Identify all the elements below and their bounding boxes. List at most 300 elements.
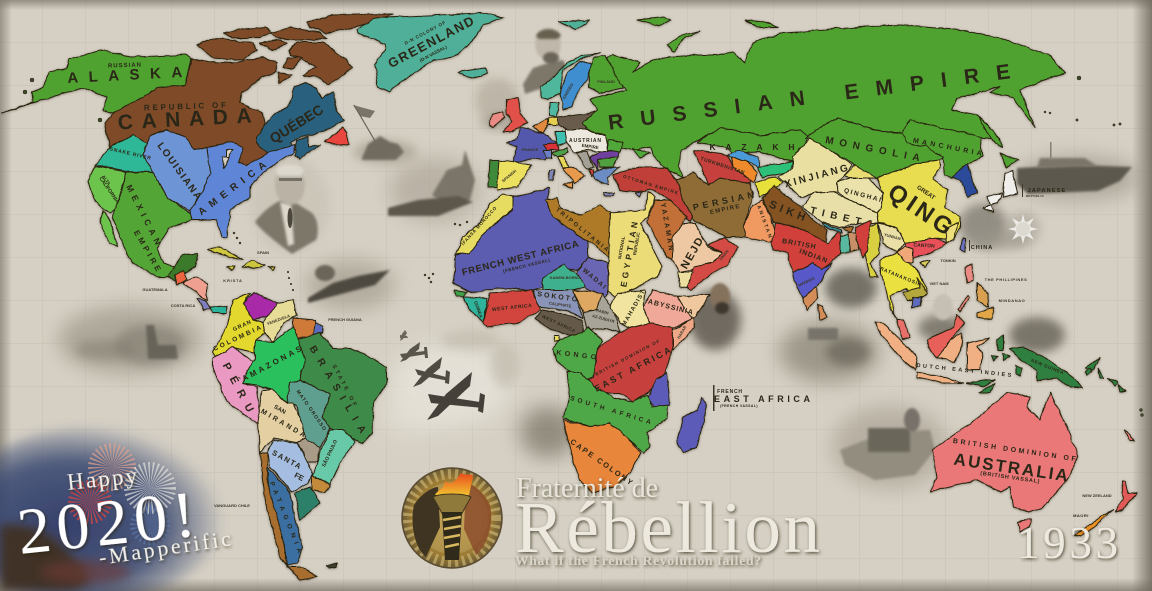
label: Wadai: WADAI (581, 267, 607, 291)
label: Harar: HARAR (676, 325, 688, 340)
label: British Dominion of Australia: (BRITISH VASSAL) (980, 471, 1040, 485)
territory: French West Africa (453, 188, 588, 293)
territory: Somalia (677, 295, 710, 320)
sepia photo: Chinese leader with smoke (959, 203, 1028, 250)
label: Austrian Empire: EMPIRE (581, 143, 599, 150)
label: Ottoman Empire: OTTOMAN EMPIRE (622, 174, 678, 195)
label: Kazakh: KAZAKH (710, 142, 794, 152)
label: French East Africa: (FRENCH VASSAL) (720, 404, 758, 408)
territory: Sakhalin (977, 115, 1002, 148)
title: Fraternité de: Fraternité de (516, 473, 658, 504)
territory: Annam (903, 277, 927, 300)
territory: Alaska (2, 50, 191, 113)
label: Santa Fe: SANTA (271, 448, 304, 471)
territory: Republic of Canada (105, 57, 277, 165)
territory: São Paulo (313, 430, 355, 485)
territory: Bengal (840, 235, 850, 253)
territory: Persian Empire (677, 173, 753, 237)
territory: Canadian Arctic islands (197, 14, 393, 85)
territory: Palawan (958, 295, 970, 312)
territory: Harar (673, 318, 695, 350)
territory: Brasilia (298, 333, 387, 443)
territory: Xinjiang (778, 138, 852, 198)
territory: Turkmenistan (693, 150, 753, 185)
label: British Indian: INDIAN (798, 248, 829, 265)
territory: Belgium (532, 118, 548, 133)
territory: Nepal (822, 223, 842, 233)
territory: San Miranda (258, 390, 305, 453)
territory: Gansu (845, 165, 880, 178)
territory: Panama (210, 306, 227, 313)
sepia photo: Tsar Nicholas portrait (523, 28, 567, 94)
territory: Serbia (577, 152, 593, 170)
label: Rabih az-Zubayr (592, 307, 615, 324)
label: Sikh Empire: SIKH (767, 199, 807, 224)
sepia photo: Roosevelt portrait (253, 161, 326, 256)
label: British Dominion of Australia: AUSTRALIA (953, 450, 1069, 485)
territory: Venetia (552, 147, 568, 157)
territory: Sumatra (875, 322, 917, 370)
territory: Java (917, 372, 963, 383)
label: Brasilia: BRASILIA (307, 344, 368, 435)
region: Americas south (213, 293, 387, 580)
territory: Canton (905, 238, 947, 258)
territory: Guiana (293, 318, 315, 338)
label: Tibet: TIBET (809, 205, 862, 228)
label: French East Africa: EAST AFRICA (714, 394, 810, 404)
label: National Egyptian Republic: NATIONAL (617, 236, 626, 259)
territory: German West Africa (535, 310, 583, 338)
territory: Ratanakosin (880, 252, 927, 322)
territory: Assam (848, 233, 858, 252)
label: Russian Alaska: ALASKA (67, 64, 183, 87)
territory: Visayas (977, 283, 988, 307)
territory: Cape Colony (563, 420, 640, 493)
icon: torch handle (442, 512, 462, 560)
territory: Yunnan (878, 223, 905, 252)
label: Austrian Empire (569, 138, 601, 150)
label: San Miranda: MIRANDA (259, 408, 306, 439)
territory: Guinea (463, 297, 487, 322)
territory: Portugal (488, 160, 499, 187)
label: Alta California: CALIFORNIA (98, 176, 120, 205)
icon: laurel left (412, 487, 440, 557)
label: Manchuria: MANCHURIA (912, 137, 982, 158)
region: Middle East and Central Asia (613, 128, 808, 290)
sepia photo: Iwo Jima statue (353, 105, 417, 164)
region: Americas north (2, 13, 503, 313)
label: Xinjiang: XINJIANG (784, 163, 849, 190)
territory: Melanesia (1085, 357, 1125, 392)
icon: Republic of China white sun (1006, 212, 1040, 246)
region: South and East Asia (763, 118, 1018, 340)
label: Morocco: IFANSA MOROCCO (460, 205, 498, 246)
label: Santa Fe: FE (293, 471, 306, 483)
territory: Kanem Bornu (543, 265, 585, 292)
label: Philippines: THE PHILLIPINES (985, 277, 1027, 282)
label: Louisiana: LOUISIANA (155, 141, 203, 202)
territory: New Guinea (1010, 348, 1083, 388)
territory: Gran Colombia (213, 293, 265, 358)
icon: torch bowl (433, 494, 471, 515)
territory: Malaya (897, 320, 910, 340)
territory: National Egyptian Republic (608, 192, 662, 298)
label: Finland: FINLAND (597, 79, 615, 84)
label: Republic of Canada: REPUBLIC OF (144, 101, 226, 112)
label: Turkmenistan: TURKMENISTAN (700, 156, 745, 176)
territory: Ottoman Empire (613, 167, 693, 222)
territory: Paraguay (297, 438, 320, 462)
label: Hejaz: YAZAMAN (659, 202, 674, 251)
label: Japanese Republic (1022, 184, 1066, 198)
territory: Amazonas (242, 323, 305, 403)
territory: Central Italy (557, 157, 570, 170)
territory: British East Africa (585, 323, 673, 402)
label: Patagonia: PATAGONIA (268, 481, 303, 554)
territory: Great Qing (877, 160, 960, 243)
region: Africa (453, 188, 710, 493)
label: British Dominion of Australia: BRITISH DOMINION OF (952, 438, 1077, 463)
label: Gran Colombia: GRAN (232, 319, 253, 333)
territory: New Zealand north (1115, 482, 1137, 512)
territory: Dutch Borneo (937, 333, 963, 362)
territory: Sokoto (533, 290, 583, 318)
territory: Greece (592, 167, 620, 185)
territory: Korea (953, 163, 978, 198)
territory: Denmark (550, 103, 558, 117)
territory: Great Lakes (222, 150, 233, 168)
territory: Portuguese South Africa (563, 372, 668, 453)
territory: Kano (573, 290, 603, 312)
territory: Peru (213, 347, 260, 423)
icon: far bomber (400, 330, 408, 341)
sepia photo: ship at sea (305, 260, 395, 310)
territory: Vanguard Chile (260, 453, 317, 580)
label: French East Africa (713, 385, 810, 411)
label: State of: STATE OF (330, 364, 358, 408)
territory: Sicily (563, 182, 573, 188)
new year greeting: 2020! (14, 478, 199, 569)
territory: Germany (558, 112, 595, 132)
territory: Oman (687, 237, 738, 290)
label: French West Africa: (FRENCH VASSAL) (503, 257, 551, 274)
icon: laurel right (464, 483, 491, 555)
territory: Crimea (633, 148, 650, 157)
territory: Caribbean islands (207, 247, 275, 270)
territory: Maori south island (1075, 510, 1113, 537)
territory: Abyssinia (643, 290, 693, 328)
label: Guatemala: GUATEMALA (142, 287, 168, 292)
label: France: FRANCE (522, 147, 539, 152)
label: German West Africa: WEST AFRICA (541, 314, 577, 334)
label: Tonkin: TONKIN (940, 258, 956, 263)
label: Greenland: (D-N VASSAL) (419, 44, 448, 63)
territory: Spain (497, 160, 532, 190)
territory: Mato Grosso (287, 380, 330, 448)
subtitle: What if the French Revolution failed? (515, 553, 761, 568)
territory: Patagonia (267, 467, 303, 565)
label: Russian Empire: RUSSIAN EMPIRE (607, 60, 1011, 135)
territory: Naples (563, 167, 585, 183)
territory: Louisiana (143, 130, 210, 213)
label: Dutch East Indies: DUTCH EAST INDIES (916, 363, 1014, 379)
territory: Hejaz (647, 200, 687, 260)
label: Austrian Empire: AUSTRIAN (569, 138, 601, 144)
sepia photo: Pacific smoke (1009, 317, 1065, 353)
territory: Albania (588, 170, 593, 177)
territory: France (507, 128, 557, 163)
label: Snake River: SNAKE RIVER (109, 146, 152, 162)
new year fireworks corner (0, 427, 225, 591)
territory: Tibet (802, 192, 878, 227)
label: San Miranda: SAN (273, 404, 286, 416)
territory: Tripolitania (545, 198, 612, 260)
territory: Ukraine (608, 140, 623, 152)
territory: Philippines Luzon (965, 265, 973, 283)
label: Mexican Empire: EMPIRE (132, 229, 163, 273)
label: Mexican Empire (124, 183, 163, 273)
territory: Timor and Moluccas (966, 335, 1022, 392)
sepia photo: Burma jungle scene (825, 268, 877, 308)
territory: Québec (257, 82, 345, 153)
territory: Krista (183, 277, 207, 300)
territory: West Africa (483, 290, 540, 327)
label: Great Qing: GREAT (915, 185, 936, 202)
label: New Guinea: NEW GUINEA (1030, 358, 1065, 376)
territory: Taiwan (960, 238, 965, 252)
sepia photo: Haile Selassie portrait (689, 283, 741, 350)
territory: Qinghai (837, 178, 883, 213)
small islands (23, 76, 1144, 416)
territory: Austrian Empire (565, 130, 608, 153)
year 1933: 1933 (1017, 518, 1118, 568)
territory: Venezuela (263, 300, 297, 342)
territory: Britain (503, 97, 528, 132)
territory: Greenland (357, 13, 503, 92)
label: Mahadist: MAHADIST (622, 289, 647, 327)
label: Alta California: ALTA (101, 174, 112, 187)
label: Peru: PÉRU (220, 360, 257, 414)
territory: Québec maritime (295, 137, 320, 159)
label: China: CHINA (971, 245, 993, 251)
territory: Mindanao (977, 307, 993, 320)
territory: Fujian (945, 222, 958, 243)
territory: Hokkaido (1000, 153, 1018, 167)
label: Greenland: GREENLAND (385, 13, 476, 71)
territory: Sweden (560, 62, 593, 110)
territory: Russian Empire (583, 25, 1065, 178)
label: Madras: MADRAS (797, 276, 816, 288)
territory: Kokand (758, 162, 793, 177)
territory: Newfoundland (325, 128, 348, 145)
label: Qinghai: QINGHAI (843, 187, 882, 204)
label: Oman: OMAN (718, 249, 730, 261)
territory: Svalbard (558, 20, 590, 30)
territory: Mongolia (805, 118, 945, 178)
label: Persian Empire: EMPIRE (709, 204, 740, 216)
label: National Egyptian Republic: EGYPTIAN (618, 221, 640, 288)
clouds and Lancaster bombers (382, 330, 519, 435)
label: Amazonas: AMAZONAS (241, 344, 304, 383)
sepia photo: battleship and aircraft (388, 150, 481, 222)
territory: Yemen (678, 272, 693, 288)
territory: Bhutan (843, 227, 853, 233)
territory: Japanese Republic south (983, 193, 1002, 213)
label: Gran Colombia: COLOMBIA (212, 324, 263, 353)
label: British Indian (781, 238, 829, 265)
label: Spain: SPANISH (501, 168, 517, 183)
territory: Franz Josef Land (637, 17, 670, 26)
territory: Baja California (100, 210, 117, 247)
territory: Severnaya Zemlya (745, 20, 778, 27)
label: Nejd: NEJD (679, 236, 706, 271)
label: Mongolia: MONGOLIA (824, 135, 921, 164)
territory: Morocco (456, 195, 515, 254)
sepia photo: Indian palace crowd (779, 322, 879, 382)
territory: French Nyasaland (647, 373, 670, 410)
territory: Alta California (88, 166, 127, 213)
territory: Switzerland (555, 132, 567, 145)
territory: Mahadist State (610, 290, 650, 328)
territory: Small Gulf of Guinea (554, 336, 559, 341)
territory: Cambodia (912, 297, 922, 308)
territory: Khiva (728, 150, 760, 168)
label: Viet Nam: VIET NAM (929, 281, 949, 286)
label: National Egyptian Republic: REPUBLIC (632, 231, 641, 256)
territory: Snake River (95, 135, 152, 172)
label: South Africa: SOUTH AFRICA (569, 395, 652, 426)
label: British Indian: BRITISH (781, 238, 817, 251)
label: Spain Caribbean: SPAIN (257, 250, 269, 255)
label: Empire of Kongo: KONGO (556, 350, 597, 361)
label: São Paulo: SÃO PAULO (320, 438, 339, 468)
territory: Falkland Islands (327, 563, 337, 568)
label: Ratanakosin: RATANAKOSIN (879, 266, 922, 288)
new year greeting: Happy (66, 463, 139, 495)
territory: Lombardy (543, 143, 558, 150)
label: New Zealand: NEW ZEELAND (1082, 493, 1112, 498)
label: Republic of Canada: CANADA (117, 105, 252, 134)
icon: firework red (79, 491, 101, 513)
icon: medium bomber (413, 357, 450, 387)
territory: Romania (590, 150, 620, 170)
territory: Badakhshan (755, 177, 783, 197)
territory: Buenos Aires (295, 487, 320, 520)
territory: Ceylon (817, 305, 827, 320)
sepia photo: cavalry scene (58, 306, 202, 374)
label: Sokoto: SOKOTO (537, 291, 580, 304)
label: French Guiana: FRENCH GUIANA (328, 317, 362, 322)
label: Costa Rica: COSTA RICA (171, 303, 195, 308)
territory: Savoy (543, 150, 552, 158)
label: Japanese Republic: JAPANESE (1028, 188, 1066, 194)
label: China (969, 240, 993, 251)
label: Rabih az-Zubayr: AZ-ZUBAYR (592, 313, 615, 324)
territory: Burma (865, 223, 880, 277)
territory: Celebes (967, 338, 990, 370)
icon: flame (435, 473, 473, 495)
label: Guinea: GUINEA (473, 300, 484, 319)
label: Sweden: SWEDEN (561, 82, 574, 100)
territory: Costa Rica (197, 298, 210, 310)
sepia photo: Japanese carrier (1016, 142, 1140, 200)
icon: firework blue (140, 515, 160, 535)
territory: Netherlands (548, 117, 558, 125)
label: French East Africa: FRENCH (717, 389, 743, 395)
label: British Dominion of East Africa: EAST AFRICA (593, 345, 673, 394)
territory: Kazakh (697, 128, 808, 162)
title: Rébellion: Rébellion (515, 487, 820, 568)
label: Persian Empire: PERSIAN (692, 190, 755, 212)
territory: Tasmania (1018, 519, 1032, 532)
label: Tripolitania: TRIPOLITANIA (554, 207, 610, 254)
territory: South India (802, 287, 818, 310)
territory: New Caledonia (1125, 430, 1134, 441)
label: Vanguard Chile: VANGUARD CHILE (214, 503, 250, 508)
territory: America (190, 142, 295, 237)
territory: Manchuria (903, 120, 983, 178)
label: Santa Fe (271, 448, 306, 483)
sepia photo: Churchill head (918, 294, 962, 341)
new year greeting: -Mapperific (97, 526, 233, 570)
territory: Crete and Cyprus (603, 192, 642, 197)
territory: Sardinia (549, 170, 555, 180)
icon: firework pink green (100, 455, 124, 479)
label: Krista: KRISTA (223, 278, 243, 283)
territory: Tonkin (897, 247, 913, 262)
label: Abyssinia: ABYSSINIA (647, 299, 694, 317)
territory: Rabih az-Zubayr (583, 293, 620, 333)
territory: French Guiana (313, 322, 323, 335)
label: Mato Grosso: MATO GROSSO (295, 389, 327, 432)
label: Venezuela: VENEZUELA (266, 313, 291, 326)
territory: Novaya Zemlya (667, 31, 700, 52)
label: Cape Colony: CAPE COLONY (569, 437, 634, 487)
territory: Finland (588, 55, 623, 93)
territory: Madagascar (677, 397, 707, 453)
label: Yunnan: YUNNAN (883, 232, 901, 241)
territory: Japanese Republic Honshu (1003, 170, 1018, 197)
label: Japanese Republic: REPUBLIC (1026, 194, 1045, 198)
territory: Bukhara (732, 158, 758, 183)
territory: Senegal (455, 290, 467, 297)
sepia photo: British portrait (475, 78, 520, 130)
sepia photo: armoured car with soldiers (832, 405, 948, 489)
label: French West Africa: FRENCH WEST AFRICA (461, 239, 580, 278)
territory: British Indian Raj (772, 223, 841, 273)
territory: Uruguay (312, 475, 330, 493)
label: Russian Alaska: RUSSIAN (108, 62, 142, 70)
territory: Norway (540, 52, 600, 100)
territory: Nejd (673, 223, 722, 272)
sepia photo: smoke near Cape (520, 406, 576, 458)
label: Afghanistan: ANISTAN (755, 205, 773, 239)
territory: Santa Fe (268, 440, 313, 492)
territory: Mexican Empire (112, 172, 192, 277)
territory: Venezuela purple state (243, 293, 277, 320)
territory: Ireland (489, 112, 505, 127)
label: Sokoto: CALIPHATE (549, 300, 572, 309)
label: Great Qing: QING (883, 178, 958, 241)
icon: firework white (137, 475, 163, 501)
label: Kanem Bornu: KANEM-BORNU (550, 275, 580, 280)
emblem: torch in laurel wreath (402, 468, 502, 568)
territory: Manipur (855, 220, 872, 258)
territory: Yucatan (168, 253, 198, 283)
label: Mexican Empire: MEXICAN (124, 183, 163, 246)
territory: Kongo (552, 327, 603, 380)
label: Greenland: D-N COLONY OF (404, 20, 447, 46)
